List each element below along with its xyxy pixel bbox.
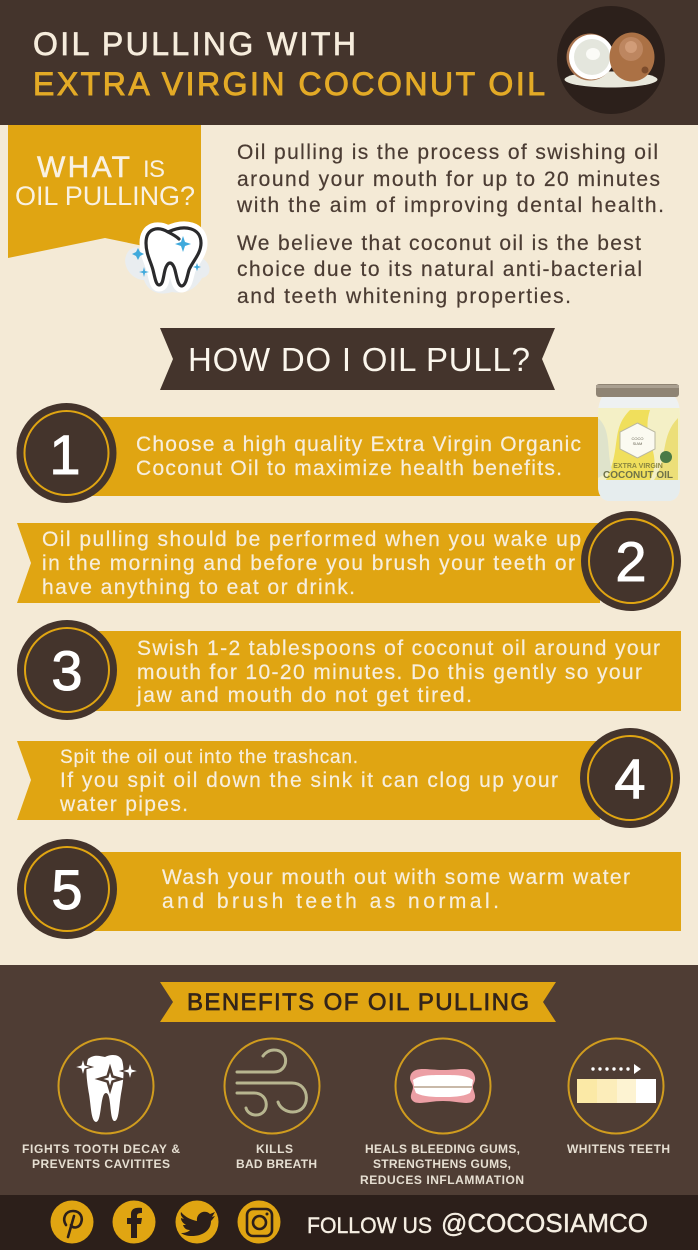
step 1: 1 <box>49 423 81 486</box>
benefit: kills bad breath <box>224 1038 320 1171</box>
product jar: SIAM <box>633 441 642 446</box>
benefit: kills bad breath: KILLS <box>256 1142 293 1156</box>
step 3: 3 <box>51 639 83 702</box>
step 3 <box>17 620 681 720</box>
step 5: 5 <box>51 858 83 921</box>
step 4: Spit the oil out into the trashcan. <box>60 747 358 768</box>
follow us text: @COCOSIAMCO <box>441 1208 648 1238</box>
footer band <box>0 1195 698 1250</box>
banner: what is oil pulling: OIL PULLING? <box>15 181 195 211</box>
step 2: Oil pulling should be performed when you wake up <box>42 528 581 551</box>
heading ribbon: benefits of oil pulling: BENEFITS OF OIL PULLING <box>187 989 529 1016</box>
benefit: fights tooth decay: PREVENTS CAVITITES <box>32 1157 170 1171</box>
step 3: Swish 1-2 tablespoons of coconut oil around your <box>137 637 660 660</box>
banner: what is oil pulling: WHAT <box>37 151 130 184</box>
product jar: COCONUT OIL <box>603 470 673 481</box>
intro text: around your mouth for up to 20 minutes <box>237 168 660 191</box>
benefit: fights tooth decay: FIGHTS TOOTH DECAY & <box>22 1142 180 1156</box>
heading ribbon: how do I oil pull: HOW DO I OIL PULL? <box>188 341 530 378</box>
title: EXTRA VIRGIN COCONUT OIL <box>33 66 545 102</box>
step 1: Coconut Oil to maximize health benefits. <box>136 457 562 480</box>
benefit: heals gums: HEALS BLEEDING GUMS, <box>365 1142 520 1156</box>
product jar <box>596 384 682 502</box>
benefit: kills bad breath: BAD BREATH <box>236 1157 317 1171</box>
step 4: 4 <box>614 747 646 810</box>
heading ribbon: benefits of oil pulling <box>160 982 556 1022</box>
step 2 <box>17 511 681 611</box>
icon: sparkling tooth sticker <box>125 228 210 294</box>
intro text: We believe that coconut oil is the best <box>237 232 641 255</box>
banner: what is oil pulling: IS <box>143 156 165 183</box>
product jar: EXTRA VIRGIN <box>613 463 663 470</box>
header band <box>0 0 698 125</box>
icon: facebook <box>112 1200 156 1244</box>
follow us text <box>307 1208 648 1238</box>
step 2: 2 <box>615 530 647 593</box>
intro text: choice due to its natural anti-bacterial <box>237 258 642 281</box>
benefit: whitens teeth <box>567 1038 670 1156</box>
step 5: and brush teeth as normal. <box>162 890 499 913</box>
icon: coconuts on a plate <box>557 6 665 114</box>
step 4: water pipes. <box>59 793 188 816</box>
step 2: in the morning and before you brush your teeth or <box>42 552 575 575</box>
panel: benefits <box>0 965 698 1195</box>
step 5 <box>17 839 681 939</box>
step 3: jaw and mouth do not get tired. <box>136 684 472 707</box>
icon: instagram <box>238 1200 280 1244</box>
benefit: heals gums: STRENGTHENS GUMS, <box>373 1157 511 1171</box>
banner: what is oil pulling <box>8 125 201 258</box>
title: OIL PULLING WITH <box>33 26 356 62</box>
step 1: Choose a high quality Extra Virgin Organic <box>136 433 581 456</box>
step 5: Wash your mouth out with some warm water <box>162 866 630 889</box>
title <box>33 26 545 102</box>
intro text <box>236 141 664 308</box>
icon: pinterest <box>50 1200 94 1244</box>
follow us text: FOLLOW US <box>307 1213 432 1238</box>
step 1 <box>16 403 605 503</box>
intro text: Oil pulling is the process of swishing oil <box>237 141 658 164</box>
intro text: with the aim of improving dental health. <box>236 194 664 217</box>
step 3: mouth for 10-20 minutes. Do this gently so your <box>137 661 642 684</box>
benefit: heals gums: REDUCES INFLAMMATION <box>360 1173 524 1187</box>
icon: twitter <box>176 1200 218 1244</box>
step 4: If you spit oil down the sink it can clog up your <box>60 769 558 792</box>
intro text: and teeth whitening properties. <box>237 285 571 308</box>
benefit: fights tooth decay <box>22 1038 180 1171</box>
benefit: heals gums <box>360 1038 524 1187</box>
product jar: COCO <box>632 436 644 441</box>
step 2: have anything to eat or drink. <box>42 576 355 599</box>
benefit: whitens teeth: WHITENS TEETH <box>567 1142 670 1156</box>
step 4 <box>17 728 680 828</box>
heading ribbon: how do I oil pull <box>160 328 555 390</box>
